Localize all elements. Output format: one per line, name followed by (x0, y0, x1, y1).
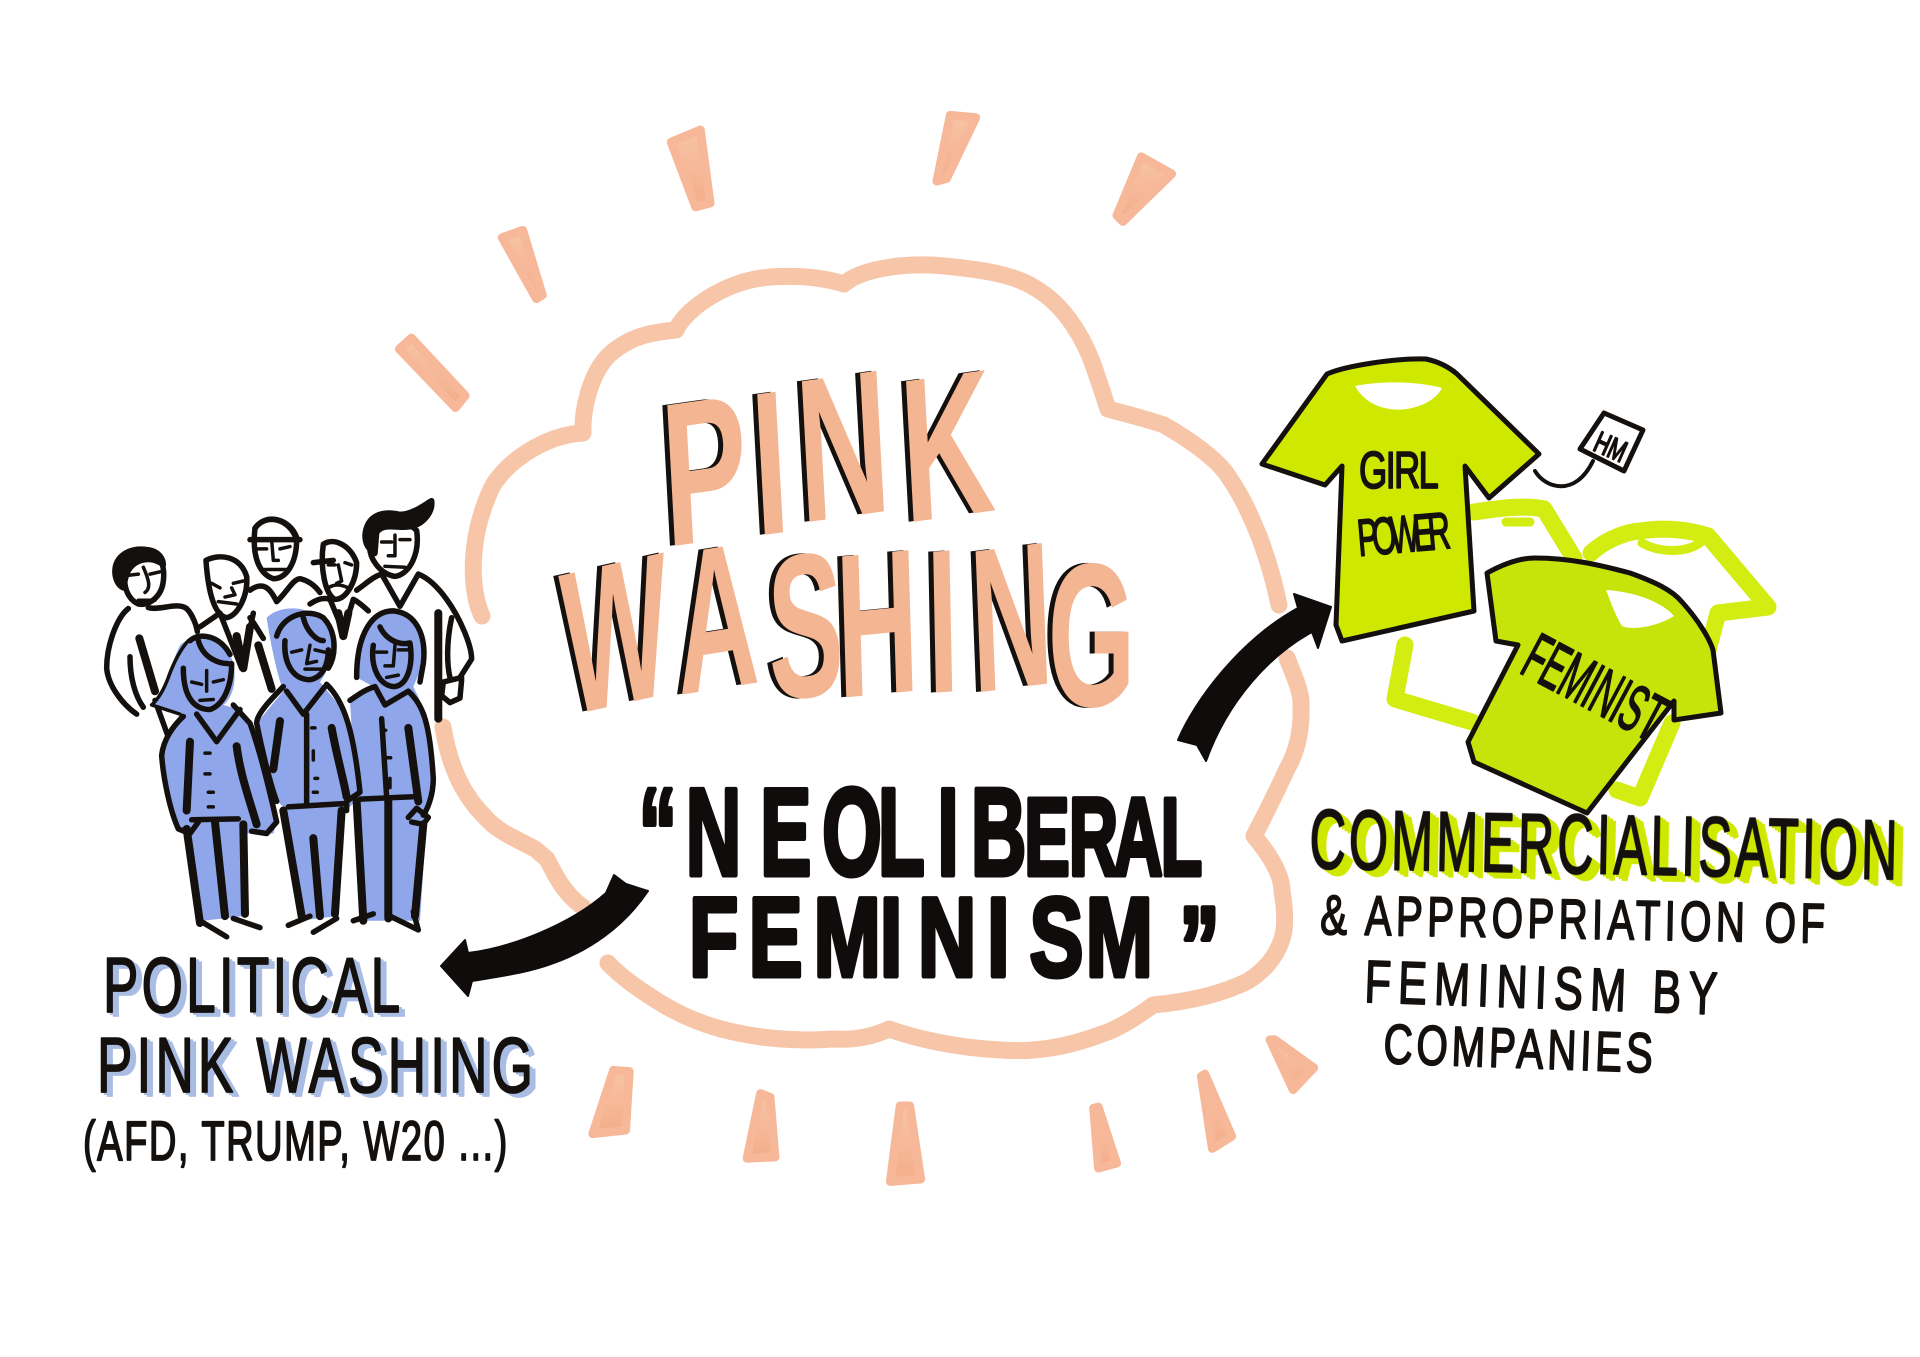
ink lines (152, 611, 433, 937)
cloud outline (443, 265, 1301, 1051)
shirt: Girl Power (1262, 359, 1539, 641)
heading text: POLITICAL (103, 943, 400, 1030)
shirt text: GIRL (1359, 440, 1439, 500)
slogan: Neoliberal Feminism: FEMINISM” (689, 875, 1220, 1009)
price tag: HM (1535, 413, 1643, 486)
sunburst rays (399, 115, 1314, 1182)
body text: FEMINISM BY (1364, 949, 1718, 1028)
front row of women in blue suits (152, 608, 435, 937)
body text (1320, 885, 1826, 1085)
slogan: Neoliberal Feminism: “NEOLIBERAL (639, 763, 1202, 901)
price tag: HM: HM (1589, 426, 1632, 469)
illustration: group of politicians (107, 501, 472, 937)
label: Commercialisation (1309, 792, 1898, 1085)
neck hole (1355, 382, 1442, 410)
shirt: Girl Power: POWER (1355, 502, 1453, 568)
label: Political Pink Washing (83, 943, 533, 1173)
examples text: (AFD, TRUMP, W20 ...) (83, 1111, 507, 1173)
heading text (97, 943, 533, 1110)
heading text: COMMERCIALISATION (1309, 792, 1898, 897)
title: Pink Washing: WASHING (555, 498, 1135, 760)
arrow: to commercialisation (1178, 594, 1331, 761)
illustration: feminist t-shirts (1262, 359, 1768, 813)
slogan: Neoliberal Feminism (639, 763, 1220, 1009)
heading text: PINK WASHING (97, 1023, 533, 1110)
neck hole (1606, 590, 1674, 628)
shirt text: FEMINIST (1511, 621, 1678, 756)
back row of men (107, 501, 472, 737)
body text: COMPANIES (1383, 1014, 1654, 1085)
body text: & APPROPRIATION OF (1320, 885, 1826, 955)
lime outline shirts behind (1395, 507, 1768, 798)
title: Pink Washing: PINK (657, 327, 999, 591)
shirt: Feminist (1468, 558, 1721, 813)
arrow: to political pink washing (441, 875, 648, 996)
blue wash (153, 608, 435, 921)
title: Pink Washing (555, 327, 1135, 760)
